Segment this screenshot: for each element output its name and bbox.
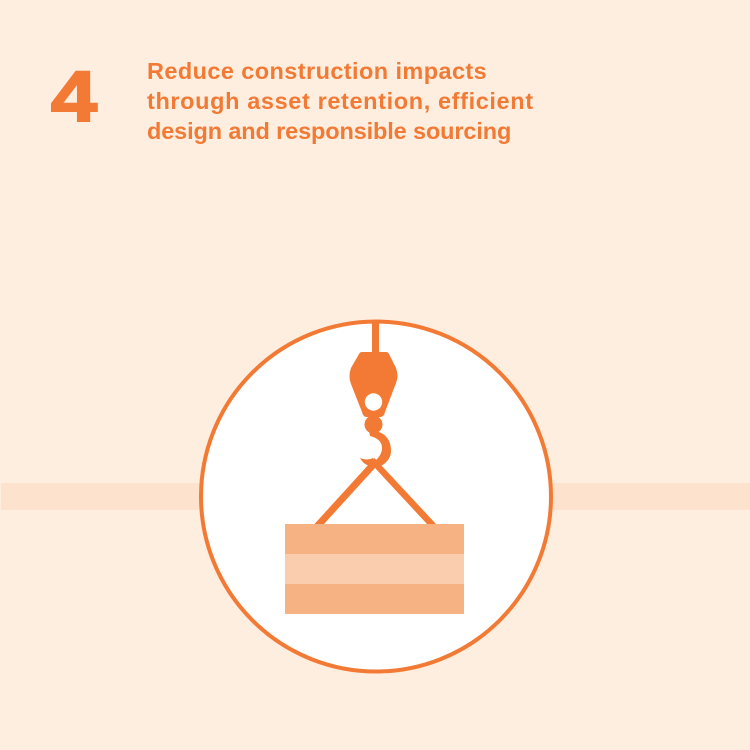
heading: through asset retention, efficient bbox=[147, 88, 534, 114]
icon: crane hook bbox=[314, 323, 436, 524]
heading: design and responsible sourcing bbox=[147, 118, 511, 144]
circle bbox=[201, 322, 551, 672]
heading: Reduce construction impacts bbox=[147, 58, 487, 84]
sling ropes bbox=[314, 458, 436, 524]
horizontal band right bbox=[552, 483, 750, 510]
horizontal band left bbox=[1, 483, 200, 510]
materials stack bbox=[285, 524, 464, 614]
number 4: 4 bbox=[51, 58, 97, 136]
heading bbox=[147, 58, 534, 144]
